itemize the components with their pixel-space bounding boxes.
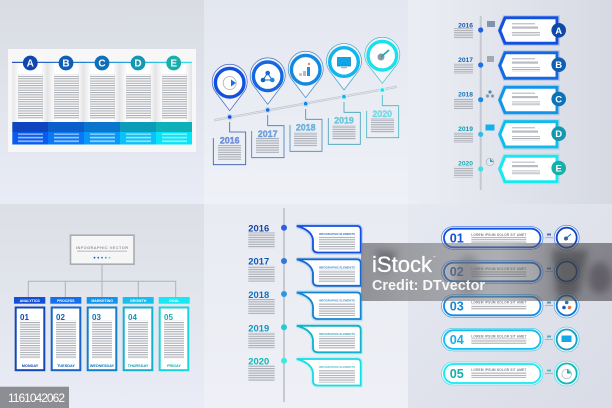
column A <box>12 62 48 144</box>
panel: org chart <box>14 235 190 370</box>
image id badge: 1161042062 <box>8 391 65 405</box>
pill 05: 05 <box>450 367 464 381</box>
connector lines <box>28 265 176 297</box>
pill 03: 03 <box>450 300 464 314</box>
column 05: GOAL <box>169 299 180 303</box>
step 2018: INFOGRAPHIC ELEMENTS <box>319 298 355 302</box>
pill 05 <box>442 361 579 386</box>
pill 03: LOREM IPSUM DOLOR SIT AMET <box>471 300 526 304</box>
column 04 <box>123 297 154 370</box>
step 2018 C: 2018 <box>458 92 473 98</box>
pill 05: LOREM IPSUM DOLOR SIT AMET <box>471 368 526 372</box>
letter badges: D <box>134 59 142 70</box>
panel: hexagon tag timeline <box>454 16 566 190</box>
step 2019 D: 2019 <box>458 126 473 133</box>
column E <box>156 62 192 144</box>
title box <box>70 235 134 264</box>
step 2016 A: A <box>555 26 562 37</box>
column 04: GROWTH <box>130 299 147 303</box>
step 2018 <box>248 289 361 319</box>
year box 2019: 2019 <box>334 116 354 126</box>
year box 2019 <box>328 102 360 144</box>
pin 2016 <box>212 64 247 111</box>
step 2019: 2019 <box>248 322 269 333</box>
column 03 <box>87 297 118 370</box>
year box 2016: 2016 <box>220 136 240 146</box>
letter badges: B <box>62 59 70 70</box>
panel: map pin timeline <box>212 37 400 165</box>
pin 2017 <box>250 58 285 104</box>
column 05 <box>159 297 190 370</box>
pill 01 <box>442 225 579 250</box>
column 02: PROCESS <box>57 299 75 303</box>
watermark band <box>361 243 612 301</box>
column 01: ANALYTICS <box>20 299 40 303</box>
column 05: FRIDAY <box>167 364 181 368</box>
step 2018 C <box>454 85 566 115</box>
step 2020: 2020 <box>248 356 269 366</box>
column 01 <box>14 297 45 370</box>
column 03: 03 <box>92 313 101 322</box>
watermark credit: Credit: DTvector <box>372 278 485 294</box>
step 2019 <box>248 322 361 352</box>
step 2020 <box>248 356 361 386</box>
column 01: MONDAY <box>22 364 39 368</box>
step 2017 <box>248 256 361 286</box>
title box: INFOGRAPHIC VECTOR <box>76 245 128 250</box>
pill 04: LOREM IPSUM DOLOR SIT AMET <box>471 334 526 338</box>
letter badges <box>23 56 181 70</box>
column 02 <box>50 297 81 370</box>
pill 03 <box>442 293 579 318</box>
pin 2020 <box>365 37 400 83</box>
panel: numbered pills <box>442 225 579 386</box>
year box 2018: 2018 <box>296 122 316 132</box>
column B <box>48 62 84 144</box>
watermark logo text: iStock <box>372 252 433 277</box>
column 04: 04 <box>128 313 137 322</box>
letter badges: A <box>27 59 34 70</box>
pill 01: LOREM IPSUM DOLOR SIT AMET <box>471 233 526 237</box>
vertical line <box>480 16 482 190</box>
image id badge <box>0 387 69 408</box>
year box 2017 <box>252 115 284 158</box>
pill 02: LOREM IPSUM DOLOR SIT AMET <box>471 267 526 271</box>
step 2017: 2017 <box>248 256 269 267</box>
column 02: 02 <box>56 313 65 322</box>
watermark band: ™ <box>432 255 436 259</box>
step 2019 D <box>454 119 566 149</box>
step 2018: 2018 <box>248 289 269 300</box>
year box 2016 <box>213 122 246 165</box>
pill 04 <box>442 327 579 352</box>
step 2019 D: D <box>555 129 562 140</box>
step 2020 E <box>454 154 566 184</box>
panel: speech bubble timeline <box>248 208 361 402</box>
year box 2020: 2020 <box>373 109 392 119</box>
column 05: 05 <box>164 313 173 322</box>
timeline nodes <box>226 87 385 120</box>
pin 2019 <box>326 44 362 90</box>
step 2016 <box>248 222 361 252</box>
step 2016: 2016 <box>248 222 269 234</box>
step 2020 E: E <box>556 164 562 174</box>
pill 01: 01 <box>450 232 464 246</box>
column 03: MARKETING <box>91 299 113 303</box>
letter badges: E <box>170 59 177 70</box>
column 02: TUESDAY <box>57 364 75 368</box>
pin 2018 <box>288 51 323 98</box>
step 2020: INFOGRAPHIC ELEMENTS <box>319 365 355 369</box>
letter badges: C <box>98 59 106 70</box>
year box 2018 <box>290 109 322 151</box>
step 2018 C: C <box>555 94 562 106</box>
step 2016: INFOGRAPHIC ELEMENTS <box>319 232 355 236</box>
step 2016 A: 2016 <box>458 22 473 30</box>
column 01: 01 <box>20 313 29 322</box>
column 04: THURSDAY <box>128 364 149 368</box>
pill 04: 04 <box>450 333 464 347</box>
column 03: WEDNESDAY <box>90 364 115 368</box>
column C <box>84 62 120 144</box>
step 2016 A <box>454 16 566 46</box>
vertical line <box>283 208 285 402</box>
step 2020 E: 2020 <box>458 160 473 168</box>
year box 2020 <box>367 95 399 138</box>
column D <box>120 62 156 144</box>
step 2017: INFOGRAPHIC ELEMENTS <box>319 265 355 269</box>
pill 02: 02 <box>450 265 464 279</box>
step 2017 B: 2017 <box>458 57 473 64</box>
panel: A to E columns card <box>8 49 196 152</box>
step 2019: INFOGRAPHIC ELEMENTS <box>319 332 355 336</box>
pill 02 <box>442 259 579 284</box>
step 2017 B: B <box>555 60 562 71</box>
step 2017 B <box>454 50 566 80</box>
rising timeline line <box>214 86 397 121</box>
year box 2017: 2017 <box>258 129 278 139</box>
